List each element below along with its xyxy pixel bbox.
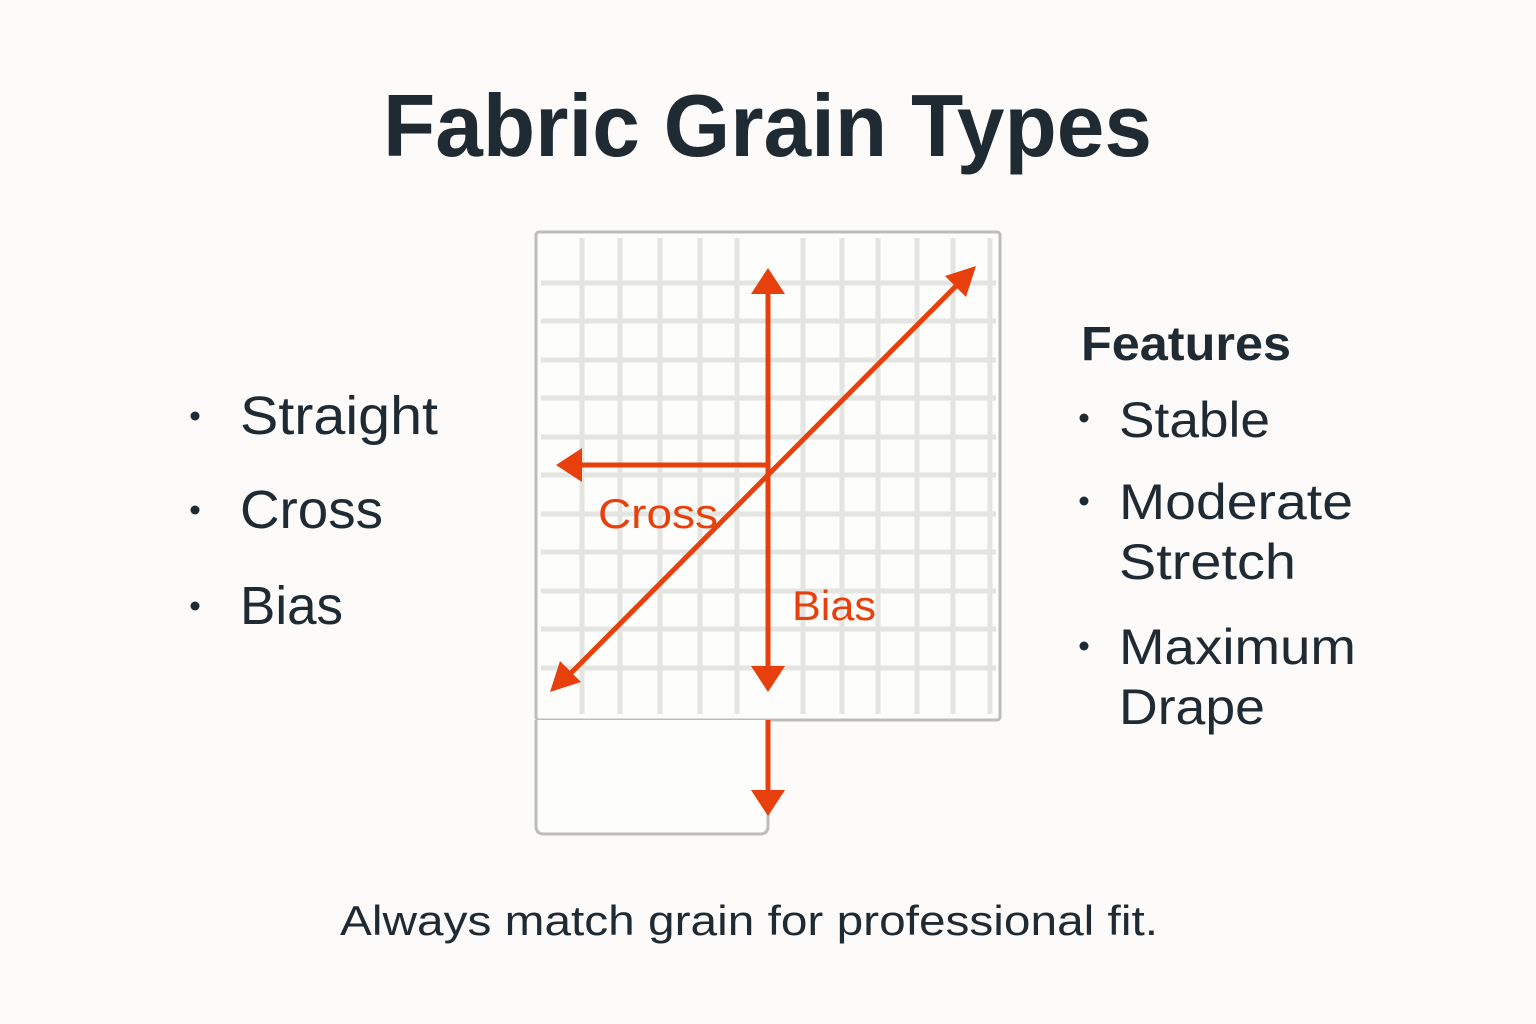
features list: Drape: [1119, 679, 1265, 735]
left list: grain types: Bias: [240, 576, 343, 636]
left list: grain types: Straight: [240, 386, 438, 446]
footer note: Always match grain for professional fit.: [340, 897, 1158, 944]
features list: Stretch: [1119, 534, 1296, 590]
arrows: [550, 266, 976, 816]
left list: grain types: Cross: [240, 480, 383, 540]
title: Fabric Grain Types: [383, 76, 1152, 175]
left list: grain types: [190, 386, 438, 636]
features list: Maximum: [1119, 619, 1356, 675]
features list: Features: [1081, 318, 1291, 371]
label: bias: Bias: [792, 582, 876, 629]
features list: Stable: [1119, 392, 1270, 448]
label: cross: Cross: [598, 490, 718, 537]
fabric grid diagram: [536, 232, 1000, 834]
features list: Moderate: [1119, 474, 1353, 530]
features list: [1080, 318, 1356, 735]
